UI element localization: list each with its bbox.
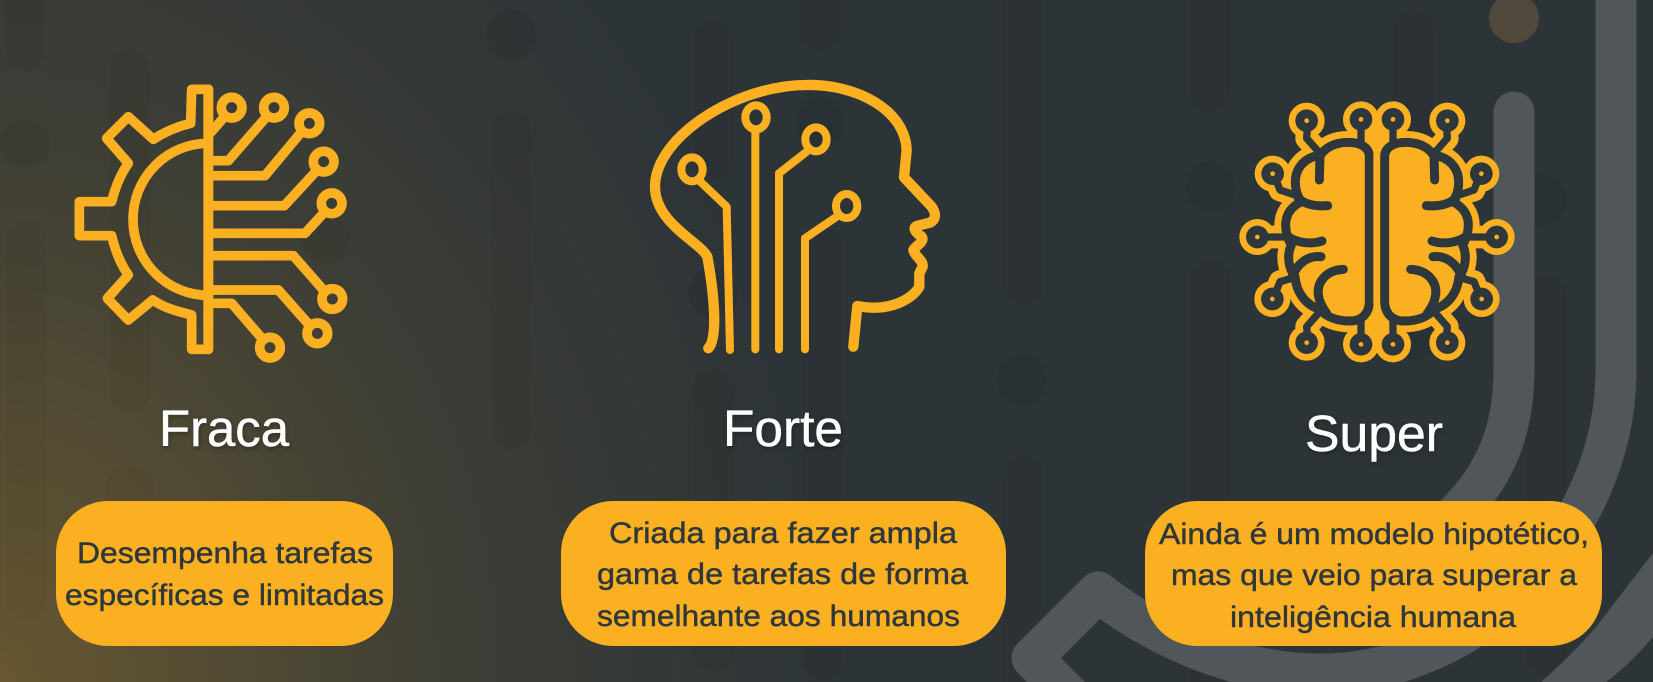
panel: Fraca (56, 89, 393, 646)
decorative grey circuit lines (1012, 0, 1653, 682)
callout box: Forte: Criada para fazer ampla (609, 517, 957, 550)
callout box: Forte (561, 501, 1006, 646)
callout box: Super: inteligência humana (1230, 601, 1516, 634)
heading: Forte: Forte (723, 400, 843, 457)
panel: Super (1145, 108, 1602, 646)
callout box: Fraca: específicas e limitadas (65, 579, 384, 612)
callout box: Super (1145, 501, 1602, 646)
heading: Super: Super (1305, 405, 1443, 462)
callout box: Forte: gama de tarefas de forma (597, 558, 968, 591)
callout box: Fraca (56, 501, 393, 646)
decorative yellow dot (1489, 0, 1539, 43)
callout box: Super: mas que veio para superar a (1171, 559, 1577, 592)
callout box: Super: Ainda é um modelo hipotético, (1159, 518, 1589, 551)
icon: brain with circuit (1246, 108, 1508, 356)
callout box: Forte: semelhante aos humanos (597, 600, 960, 633)
heading: Fraca: Fraca (159, 400, 290, 457)
icon: gear circuit (79, 89, 343, 358)
icon: head with circuit (655, 85, 935, 350)
panel: Forte (561, 85, 1006, 646)
callout box: Fraca: Desempenha tarefas (77, 537, 373, 570)
